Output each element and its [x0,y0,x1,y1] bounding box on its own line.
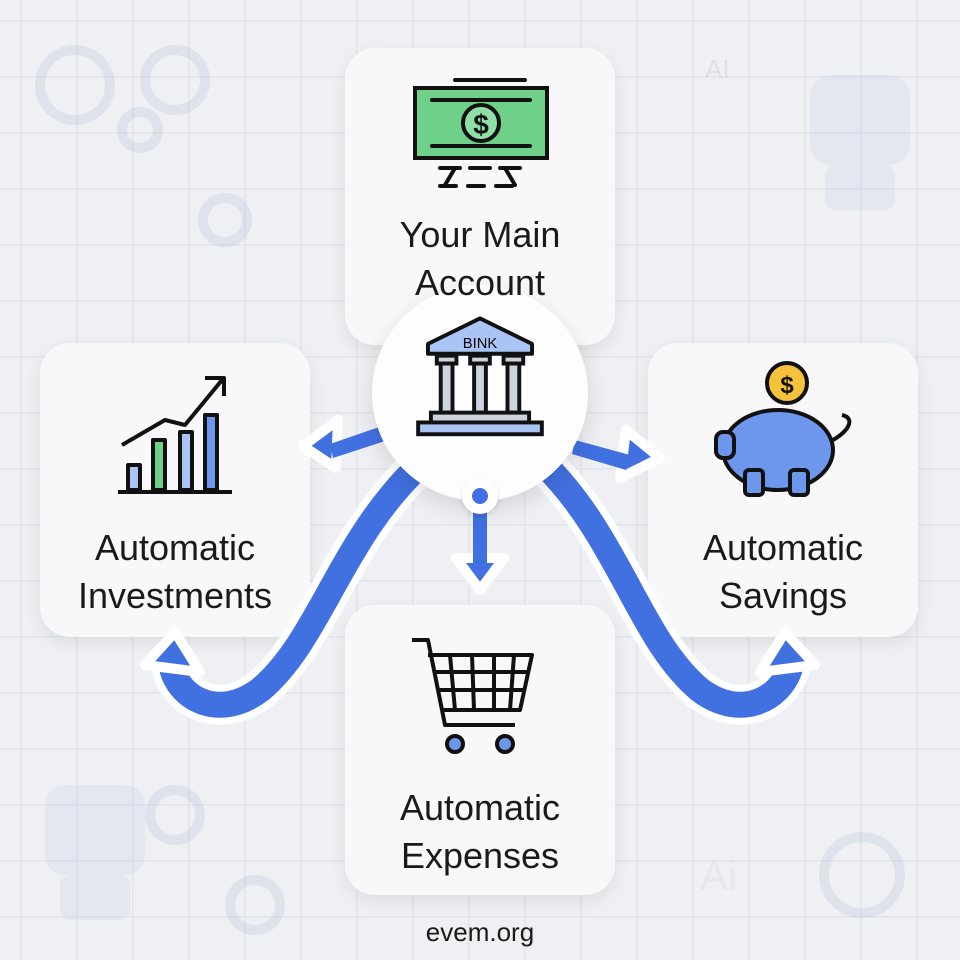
icons: $ [473,109,489,140]
icon: bank: BINK [463,336,497,352]
text: expenses: Automatic [400,787,560,828]
text: main account: Your Main [400,214,560,255]
text: savings: Savings [719,575,847,616]
text: investments: Automatic [95,527,255,568]
text: investments: Investments [78,575,272,616]
card: investments [40,343,310,637]
center bank circle [372,285,588,501]
icon: cart [412,640,532,752]
icon: chart [118,378,232,492]
icon: piggy bank [716,363,849,495]
decorative background icons: AI [705,54,730,84]
footer: evem.org [426,917,534,947]
card: savings [648,343,918,637]
text: investments [78,527,272,616]
icons: $ [780,372,794,399]
text: expenses [400,787,560,876]
icon: bank [416,316,544,436]
card: main account [345,48,615,345]
text: expenses: Expenses [401,835,559,876]
connector dot [462,478,498,514]
text: main account [400,214,560,303]
text: savings: Automatic [703,527,863,568]
text: savings [703,527,863,616]
text: main account: Account [415,262,545,303]
decorative background icons: Ai [700,852,737,899]
icon: money monitor [415,80,547,186]
card: expenses [345,605,615,895]
